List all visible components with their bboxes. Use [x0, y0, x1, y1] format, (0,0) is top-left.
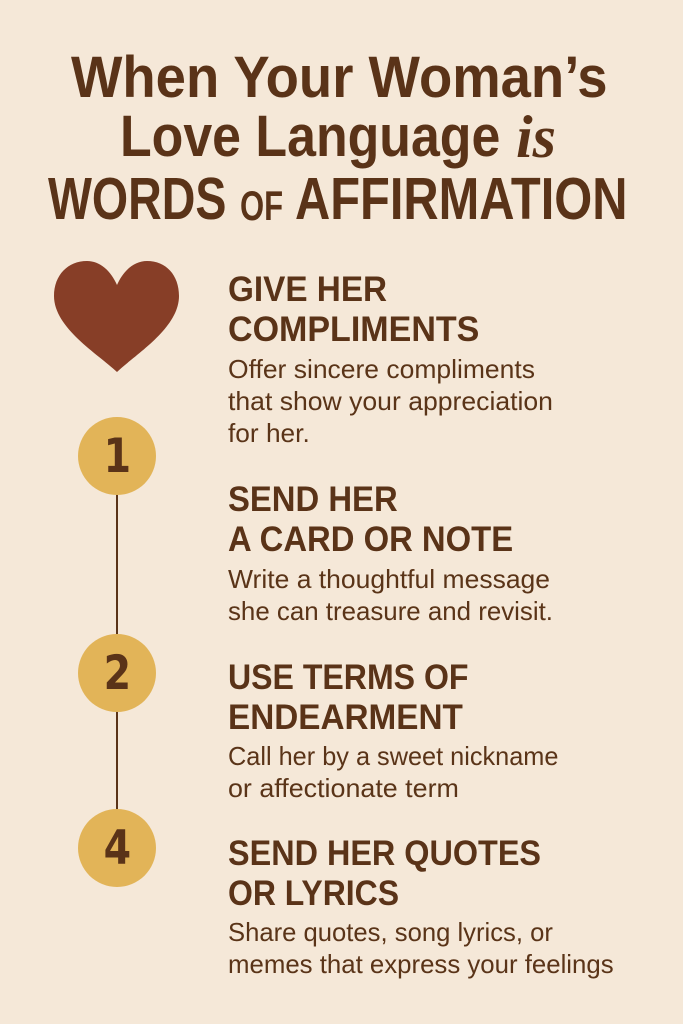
item 2 text: Write a thoughtful message — [228, 564, 550, 594]
item 2 heading: SEND HER — [228, 480, 398, 519]
icon: heart — [54, 261, 179, 372]
number badge 4: 4 — [103, 821, 131, 876]
item 1 heading — [228, 270, 479, 349]
item 1 heading: COMPLIMENTS — [228, 310, 479, 349]
item 4 heading: OR LYRICS — [228, 874, 399, 913]
item 4 text: Share quotes, song lyrics, or — [228, 917, 553, 947]
item 3 heading: USE TERMS OF — [228, 658, 468, 697]
title: OF — [240, 182, 283, 229]
number badge 2 — [78, 634, 156, 712]
item 2 heading: A CARD OR NOTE — [228, 520, 513, 559]
item 3 text — [228, 741, 558, 803]
item 3 heading: ENDEARMENT — [228, 698, 463, 737]
number badge 1 — [78, 417, 156, 495]
item 1 heading: GIVE HER — [228, 270, 387, 309]
number badge 4 — [78, 809, 156, 887]
item 1 text: that show your appreciation — [228, 386, 553, 416]
title: When Your Woman’s — [71, 45, 608, 110]
item 2 text: she can treasure and revisit. — [228, 596, 553, 626]
item 2 text — [228, 564, 553, 626]
item 3 text: or affectionate term — [228, 773, 459, 803]
title: WORDS — [48, 166, 226, 232]
number badge 2: 2 — [103, 646, 131, 701]
item 4 heading: SEND HER QUOTES — [228, 834, 541, 873]
item 4 text — [228, 917, 614, 979]
item 2 heading — [228, 480, 513, 559]
title: AFFIRMATION — [295, 166, 627, 232]
item 4 text: memes that express your feelings — [228, 949, 614, 979]
title — [48, 45, 627, 232]
item 4 heading — [228, 834, 541, 913]
item 1 text — [228, 354, 553, 448]
title: is — [516, 104, 556, 170]
item 3 heading — [228, 658, 468, 737]
item 1 text: for her. — [228, 418, 310, 448]
item 1 text: Offer sincere compliments — [228, 354, 535, 384]
number badge 1: 1 — [103, 429, 131, 484]
timeline connector — [116, 490, 118, 815]
title: Love Language — [120, 104, 500, 169]
item 3 text: Call her by a sweet nickname — [228, 741, 558, 771]
